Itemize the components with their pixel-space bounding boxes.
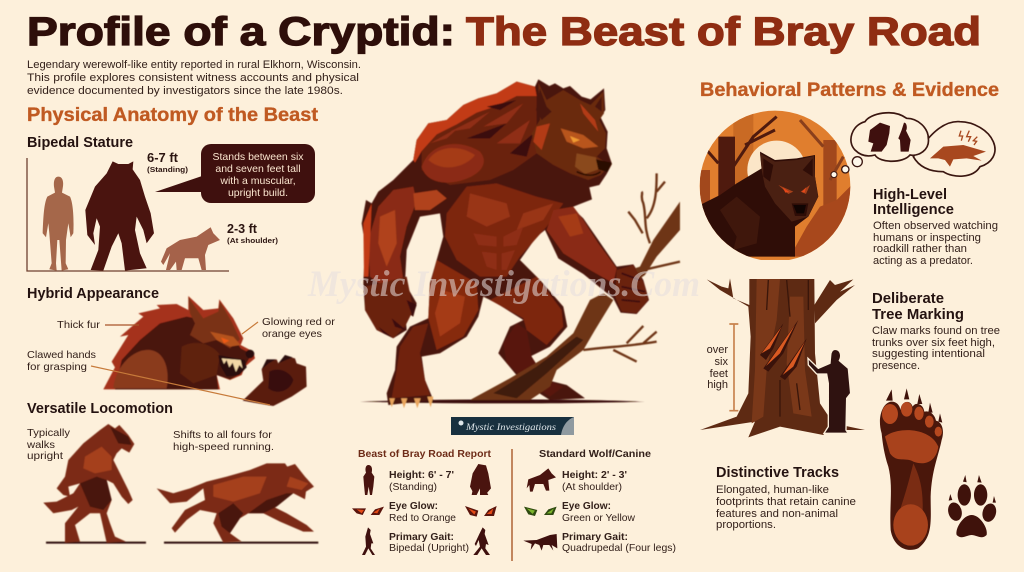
text: deliberate tree marking bbox=[872, 291, 1000, 372]
column: beast of bray road: Beast of Bray Road Report bbox=[358, 448, 492, 460]
text: shifts to all fours: Shifts to all fours for bbox=[173, 429, 273, 441]
illustration: upright walking beast bbox=[43, 424, 318, 544]
panel: deliberate tree marking bbox=[700, 278, 1000, 437]
legs bbox=[428, 260, 478, 350]
heading: versatile locomotion: Versatile Locomotion bbox=[27, 401, 173, 417]
text: high-level intelligence: Intelligence bbox=[873, 202, 954, 218]
chest and abs bbox=[445, 183, 563, 277]
text: distinctive tracks: proportions. bbox=[716, 519, 776, 531]
row: height bbox=[363, 464, 491, 495]
logo: mystic investigations bbox=[451, 417, 574, 435]
ground line bbox=[360, 399, 645, 403]
branch bbox=[470, 293, 613, 400]
annotation: clawed hands bbox=[27, 349, 270, 405]
human silhouette bbox=[43, 177, 74, 271]
label: over six feet high: over bbox=[707, 344, 728, 356]
heading: hybrid appearance: Hybrid Appearance bbox=[27, 286, 159, 302]
row: primary gait: Bipedal (Upright) bbox=[389, 542, 469, 554]
text: distinctive tracks bbox=[716, 465, 856, 531]
panel: bipedal stature bbox=[27, 135, 315, 271]
height chart axes bbox=[27, 158, 229, 271]
text: high-level intelligence bbox=[873, 187, 998, 267]
intro text: evidence documented by investigators since the late 1980s. bbox=[27, 85, 343, 97]
label: 2-3 ft: 2-3 ft bbox=[227, 222, 258, 236]
column: standard wolf bbox=[523, 448, 676, 554]
row: height bbox=[527, 468, 627, 493]
row: primary gait: Primary Gait: bbox=[389, 531, 454, 543]
row: primary gait: Quadrupedal (Four legs) bbox=[562, 542, 676, 554]
illustration: beast footprint bbox=[880, 388, 943, 550]
column: beast of bray road bbox=[352, 448, 497, 555]
title bbox=[27, 10, 981, 54]
callout: and seven feet tall bbox=[215, 163, 301, 175]
text: high-level intelligence: roadkill rather than bbox=[873, 243, 967, 255]
text: typically walks upright: walks bbox=[26, 439, 55, 451]
annotation: clawed hands: for grasping bbox=[27, 361, 87, 373]
title: Profile of a Cryptid: bbox=[27, 10, 455, 54]
heading: physical anatomy: Physical Anatomy of the Beast bbox=[27, 104, 319, 126]
mane bbox=[422, 95, 537, 185]
watermark: Mystic Investigations.Com bbox=[307, 264, 700, 305]
label: 2-3 ft bbox=[227, 222, 279, 245]
text: deliberate tree marking: Deliberate bbox=[872, 291, 944, 307]
illustration: beast head and shoulders bbox=[103, 296, 307, 406]
row: height: (Standing) bbox=[389, 481, 437, 493]
row: eye glow: Green or Yellow bbox=[562, 512, 635, 524]
text: typically walks upright: upright bbox=[27, 450, 63, 462]
arm right bbox=[547, 207, 617, 283]
row: primary gait bbox=[523, 531, 676, 554]
row: primary gait bbox=[362, 527, 490, 555]
text: deliberate tree marking: presence. bbox=[872, 360, 920, 372]
label: 2-3 ft: (At shoulder) bbox=[227, 236, 279, 245]
label: over six feet high: high bbox=[707, 379, 728, 391]
annotation: glowing eyes bbox=[242, 316, 336, 340]
text: high-level intelligence: Often observed watching bbox=[873, 220, 998, 232]
heading: behavioral patterns: Behavioral Patterns & Evidence bbox=[700, 79, 999, 101]
text: typically walks upright bbox=[26, 427, 71, 462]
callout bbox=[155, 144, 315, 203]
text: distinctive tracks: features and non-animal bbox=[716, 508, 838, 520]
row: height: Height: 2' - 3' bbox=[562, 469, 627, 481]
arm left bbox=[368, 187, 417, 287]
panel: distinctive tracks bbox=[716, 388, 998, 550]
wolf silhouette bbox=[161, 227, 220, 270]
annotation: glowing eyes: orange eyes bbox=[262, 328, 322, 340]
annotation: glowing eyes: Glowing red or bbox=[262, 316, 336, 328]
shoulder muscle bbox=[422, 144, 484, 183]
head bbox=[532, 83, 610, 180]
row: primary gait: Primary Gait: bbox=[562, 531, 628, 543]
beast silhouette bbox=[85, 161, 154, 271]
intro text: Legendary werewolf-like entity reported in rural Elkhorn, Wisconsin. bbox=[27, 59, 361, 71]
hand over branch bbox=[615, 265, 648, 313]
text: distinctive tracks: footprints that retain canine bbox=[716, 496, 856, 508]
text: typically walks upright: Typically bbox=[27, 427, 71, 439]
row: eye glow: Eye Glow: bbox=[562, 500, 611, 512]
row: eye glow: Eye Glow: bbox=[389, 500, 438, 512]
row: height: Height: 6' - 7' bbox=[389, 469, 454, 481]
intro text: This profile explores consistent witness accounts and physical bbox=[27, 72, 359, 84]
heading: bipedal stature: Bipedal Stature bbox=[27, 135, 133, 151]
text: shifts to all fours: high-speed running. bbox=[173, 441, 274, 453]
thought cloud bbox=[831, 113, 995, 178]
text: distinctive tracks: Distinctive Tracks bbox=[716, 465, 839, 481]
callout: upright build. bbox=[228, 187, 288, 199]
callout: Stands between six bbox=[212, 151, 304, 163]
text: deliberate tree marking: suggesting intentional bbox=[872, 348, 985, 360]
label: 6-7 ft bbox=[147, 151, 189, 174]
callout: with a muscular, bbox=[219, 175, 296, 187]
text: high-level intelligence: High-Level bbox=[873, 187, 947, 203]
text: distinctive tracks: Elongated, human-like bbox=[716, 484, 829, 496]
row: eye glow bbox=[352, 500, 497, 524]
panel: versatile locomotion bbox=[26, 401, 318, 544]
annotation: thick fur bbox=[57, 319, 139, 331]
text: high-level intelligence: humans or inspecting bbox=[873, 232, 981, 244]
label: over six feet high: six bbox=[715, 356, 728, 368]
illustration: canine paw print bbox=[946, 475, 998, 537]
label: over six feet high: feet bbox=[710, 368, 728, 380]
row: height: (At shoulder) bbox=[562, 481, 622, 493]
text: high-level intelligence: acting as a predator. bbox=[873, 255, 973, 267]
text: deliberate tree marking: trunks over six feet high, bbox=[872, 337, 995, 349]
illustration: running beast bbox=[157, 463, 314, 543]
title: The Beast of Bray Road bbox=[466, 10, 981, 54]
column: standard wolf: Standard Wolf/Canine bbox=[539, 448, 651, 460]
text: deliberate tree marking: Claw marks found on tree bbox=[872, 325, 1000, 337]
claws bbox=[389, 397, 433, 408]
panel: comparison table bbox=[352, 448, 676, 561]
row: eye glow bbox=[524, 500, 635, 524]
illustration: beast in forest bbox=[697, 110, 853, 260]
panel: high-level intelligence bbox=[697, 110, 998, 267]
annotation: thick fur: Thick fur bbox=[57, 319, 101, 331]
label: 6-7 ft: 6-7 ft bbox=[147, 151, 179, 165]
text: deliberate tree marking: Tree Marking bbox=[872, 307, 964, 323]
text: shifts to all fours bbox=[173, 429, 274, 453]
illustration: clawed tree with man bbox=[700, 278, 865, 437]
intro text bbox=[27, 59, 361, 97]
annotation: clawed hands: Clawed hands bbox=[27, 349, 96, 361]
panel: hybrid appearance bbox=[27, 286, 336, 406]
beast body bbox=[362, 79, 649, 405]
illustration: central beast with branch bbox=[360, 79, 680, 408]
label: 6-7 ft: (Standing) bbox=[147, 165, 189, 174]
row: eye glow: Red to Orange bbox=[389, 512, 456, 524]
divider bbox=[511, 449, 513, 561]
label: over six feet high bbox=[707, 344, 728, 391]
logo: mystic investigations: Mystic Investigations bbox=[465, 423, 556, 433]
